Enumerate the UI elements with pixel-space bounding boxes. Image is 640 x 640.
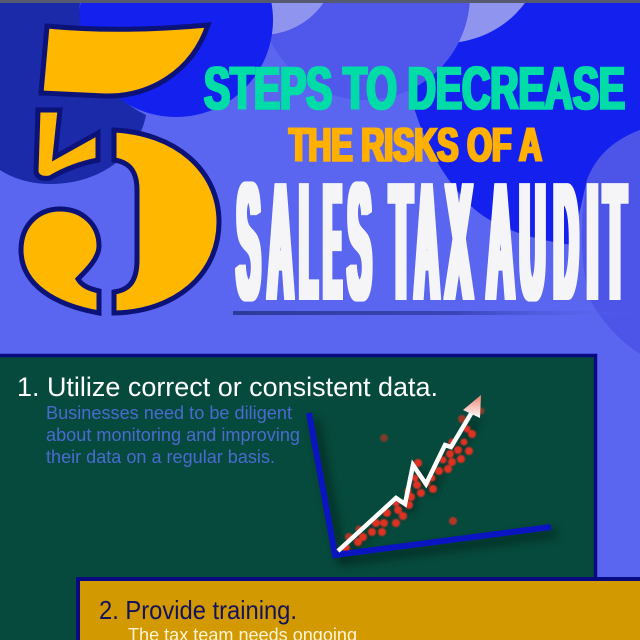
title line: sales tax audit: E: [324, 149, 341, 335]
title line: sales tax audit: U: [520, 149, 545, 335]
numeral 5: [21, 25, 219, 313]
title line: sales tax audit: S: [237, 149, 260, 335]
title line: sales tax audit: L: [300, 149, 317, 335]
chart axes: [309, 413, 551, 555]
step 1 description: their data on a regular basis.: [46, 447, 275, 467]
step 1 description: [46, 403, 300, 467]
title underline: [233, 311, 640, 315]
panel: step 2: [78, 579, 640, 640]
title line: sales tax audit: A: [268, 149, 293, 335]
title line: sales tax audit: X: [446, 149, 472, 335]
chart: rising trend scatter: [309, 395, 557, 561]
title line: sales tax audit: S: [348, 149, 371, 335]
step 2 heading: 2. Provide training.: [99, 595, 297, 625]
title line: sales tax audit: A: [415, 149, 439, 335]
step 1 description: about monitoring and improving: [46, 425, 300, 445]
panel: step 1: [0, 356, 596, 640]
title line: sales tax audit: [237, 149, 626, 335]
step 1 description: Businesses need to be diligent: [46, 403, 292, 423]
title line: sales tax audit: T: [390, 149, 412, 335]
trend arrow: [338, 395, 481, 551]
title line: sales tax audit: I: [587, 149, 598, 335]
step 1 heading: 1. Utilize correct or consistent data.: [17, 372, 438, 402]
title line: sales tax audit: A: [487, 149, 514, 335]
